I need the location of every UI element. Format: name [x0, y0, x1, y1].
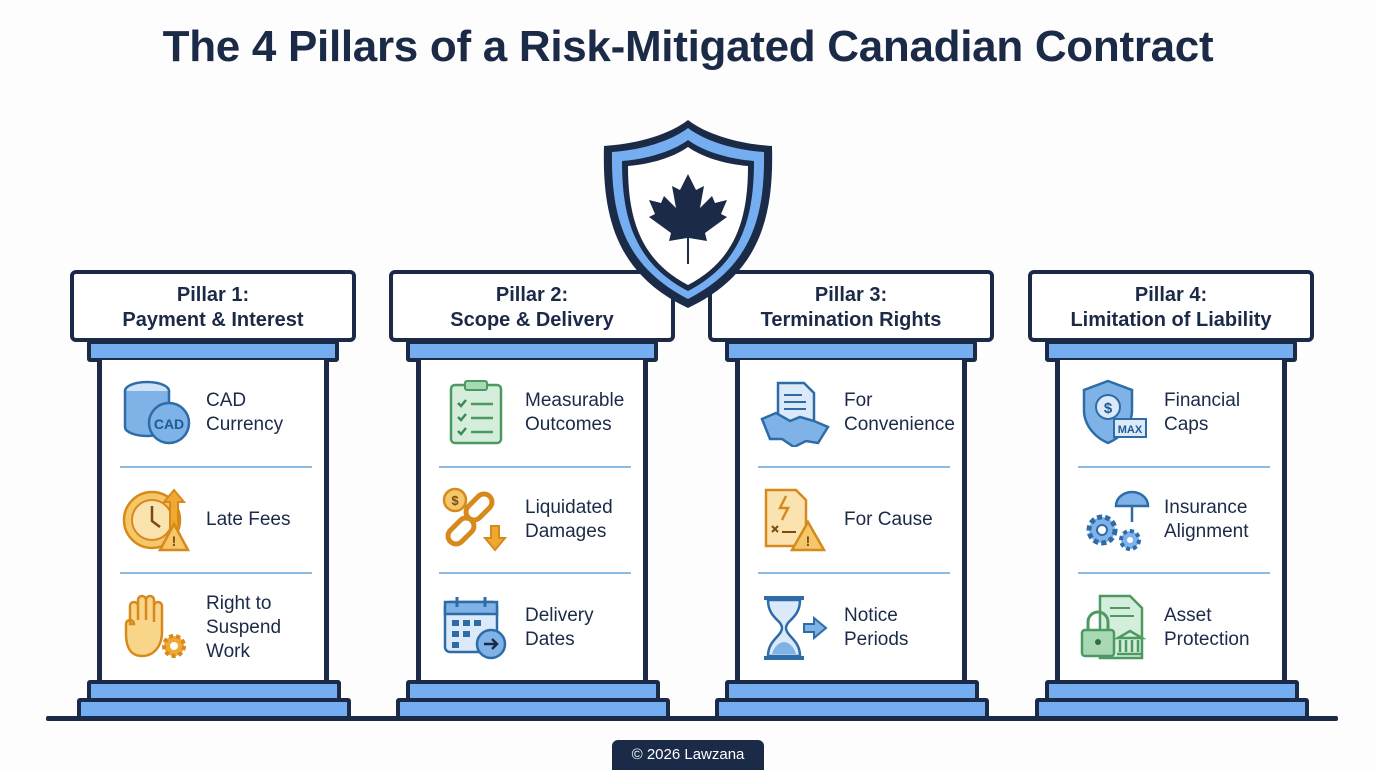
- item: late fees: !: [172, 533, 176, 549]
- item: right to suspend: Suspend: [206, 617, 281, 638]
- item: notice periods: Notice: [844, 605, 898, 626]
- item: right to suspend: Right to: [206, 593, 271, 614]
- item: for convenience: Convenience: [844, 414, 955, 435]
- item: financial caps: Caps: [1164, 414, 1208, 435]
- item: measurable outcomes: [450, 380, 624, 444]
- pillar 3: Termination Rights: [761, 309, 941, 331]
- pillar 4: Pillar 4:: [1135, 284, 1207, 306]
- item: financial caps: Financial: [1164, 390, 1240, 411]
- item: asset protection: [1080, 594, 1250, 660]
- item: liquidated damages: Damages: [525, 521, 606, 542]
- pillar 4: Limitation of Liability: [1070, 309, 1272, 331]
- item: late fees: [122, 488, 290, 552]
- item: delivery dates: [444, 597, 594, 660]
- item: insurance alignment: Alignment: [1164, 521, 1248, 542]
- item: asset protection: Asset: [1164, 605, 1212, 626]
- item: delivery dates: Dates: [525, 629, 575, 650]
- item: insurance alignment: [1086, 490, 1248, 551]
- item: notice periods: [764, 596, 908, 660]
- item: for cause: [764, 488, 933, 552]
- item: late fees: Late Fees: [206, 509, 290, 530]
- item: notice periods: Periods: [844, 629, 908, 650]
- pillar 1: Payment & Interest: [122, 309, 304, 331]
- ground line: [46, 716, 1338, 721]
- item: for convenience: For: [844, 390, 872, 411]
- icon: maple leaf shield: [604, 120, 772, 308]
- item: for cause: !: [806, 533, 810, 549]
- item: delivery dates: Delivery: [525, 605, 594, 626]
- item: asset protection: Protection: [1164, 629, 1250, 650]
- item: liquidated damages: $: [451, 493, 459, 508]
- pillar 3: [708, 270, 994, 716]
- item: CAD currency: [124, 380, 283, 444]
- title: The 4 Pillars of a Risk-Mitigated Canadian Contract: [163, 22, 1213, 71]
- item: for cause: For Cause: [844, 509, 933, 530]
- item: for convenience: [760, 382, 955, 447]
- item: financial caps: $: [1104, 400, 1113, 417]
- pillar 2: Scope & Delivery: [450, 309, 614, 331]
- pillar 1: Pillar 1:: [177, 284, 249, 306]
- item: CAD currency: Currency: [206, 414, 283, 435]
- pillar 2: Pillar 2:: [496, 284, 568, 306]
- item: CAD currency: CAD: [206, 390, 246, 411]
- item: financial caps: MAX: [1118, 424, 1143, 436]
- item: right to suspend: Work: [206, 641, 250, 662]
- item: liquidated damages: [442, 488, 613, 552]
- item: financial caps: [1082, 380, 1240, 444]
- item: insurance alignment: Insurance: [1164, 497, 1247, 518]
- item: CAD currency: CAD: [154, 416, 184, 432]
- footer: copyright: © 2026 Lawzana: [632, 746, 744, 763]
- item: liquidated damages: Liquidated: [525, 497, 613, 518]
- pillar 1: [70, 270, 356, 716]
- item: right to suspend: [124, 593, 281, 662]
- item: measurable outcomes: Measurable: [525, 390, 624, 411]
- item: measurable outcomes: Outcomes: [525, 414, 612, 435]
- footer: copyright: [612, 740, 764, 770]
- pillar 4: [1028, 270, 1314, 716]
- pillar 3: Pillar 3:: [815, 284, 887, 306]
- pillar 2: [389, 270, 675, 716]
